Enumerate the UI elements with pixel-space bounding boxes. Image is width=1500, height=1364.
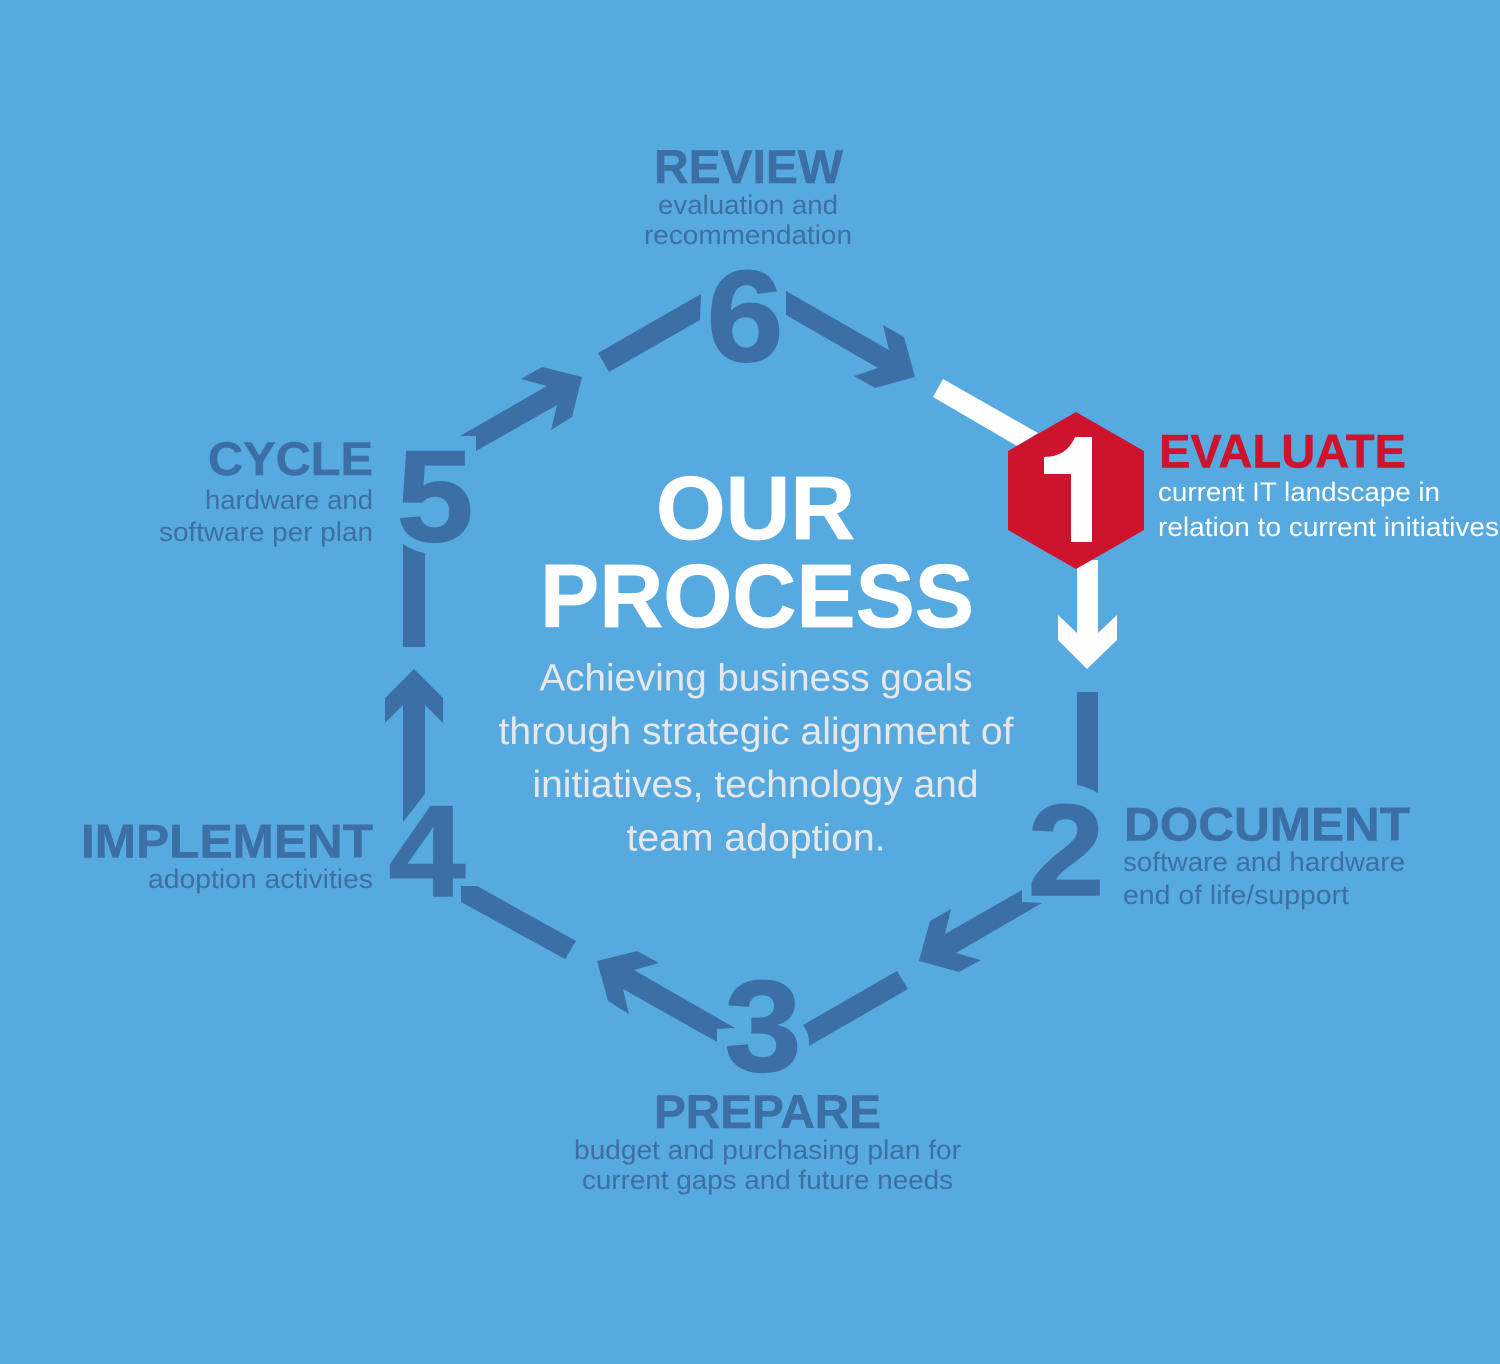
arrow: step 2 to step 3	[919, 890, 1042, 972]
heading: evaluate: EVALUATE	[1159, 424, 1406, 478]
heading: implement: IMPLEMENT	[81, 814, 373, 868]
description: prepare	[574, 1135, 961, 1195]
description: review: recommendation	[644, 220, 852, 250]
subtitle text block: Achieving business goals	[540, 658, 972, 700]
arrow: step 1 to step 2	[1058, 560, 1117, 669]
description: prepare: current gaps and future needs	[582, 1165, 953, 1195]
heading: cycle: CYCLE	[208, 432, 373, 485]
number 1	[1044, 437, 1092, 542]
number 3: 3	[724, 953, 802, 1099]
title: our process: PROCESS	[540, 547, 974, 647]
description: document: end of life/support	[1123, 880, 1350, 910]
arrow segment: entering step 1	[933, 379, 1038, 446]
heading: prepare: PREPARE	[654, 1085, 881, 1138]
arrow: step 4 to step 5	[385, 669, 443, 822]
subtitle text block	[498, 658, 1014, 860]
arrow: step 5 to step 6	[460, 367, 582, 451]
subtitle text block: through strategic alignment of	[498, 711, 1014, 753]
description: implement: adoption activities	[148, 864, 373, 894]
description: cycle: hardware and	[205, 485, 373, 515]
number 1: 1	[1026, 406, 1110, 574]
number 4: 4	[388, 778, 466, 924]
heading: review: REVIEW	[654, 140, 844, 193]
title: our process: OUR	[656, 459, 855, 559]
title: our process	[540, 459, 974, 647]
description: review	[644, 190, 852, 250]
arrow: step 6 to step 1	[786, 291, 915, 388]
arrow segment: below number 5	[403, 544, 425, 647]
description: cycle	[159, 485, 373, 547]
heading: document: DOCUMENT	[1124, 798, 1410, 850]
arrow segment: right of number 4	[461, 886, 576, 959]
arrow segment: right of number 3	[803, 971, 908, 1046]
step 3: prepare	[574, 953, 961, 1195]
description: evaluate	[1158, 477, 1499, 542]
number 5: 5	[396, 423, 474, 569]
number 6: 6	[706, 243, 784, 389]
description: review: evaluation and	[658, 190, 838, 220]
subtitle text block: initiatives, technology and	[532, 764, 978, 806]
description: evaluate: current IT landscape in	[1158, 477, 1440, 507]
step 1: evaluate text	[1158, 424, 1499, 542]
description: document: software and hardware	[1123, 847, 1405, 877]
arrow: step 3 to step 4	[597, 951, 735, 1042]
description: prepare: budget and purchasing plan for	[574, 1135, 961, 1165]
description: cycle: software per plan	[159, 517, 373, 547]
arrow segment: left of number 6	[598, 294, 701, 372]
description: document	[1123, 847, 1405, 910]
step 6: review	[644, 140, 852, 389]
step 2: document	[1028, 777, 1410, 923]
step 4: implement	[81, 778, 466, 924]
description: evaluate: relation to current initiatives	[1158, 512, 1499, 542]
step 5: cycle	[159, 423, 474, 569]
number 2: 2	[1028, 777, 1104, 923]
hexagon badge: step 1	[1008, 412, 1144, 569]
subtitle text block: team adoption.	[626, 818, 886, 860]
arrow segment: above number 2	[1077, 692, 1098, 793]
